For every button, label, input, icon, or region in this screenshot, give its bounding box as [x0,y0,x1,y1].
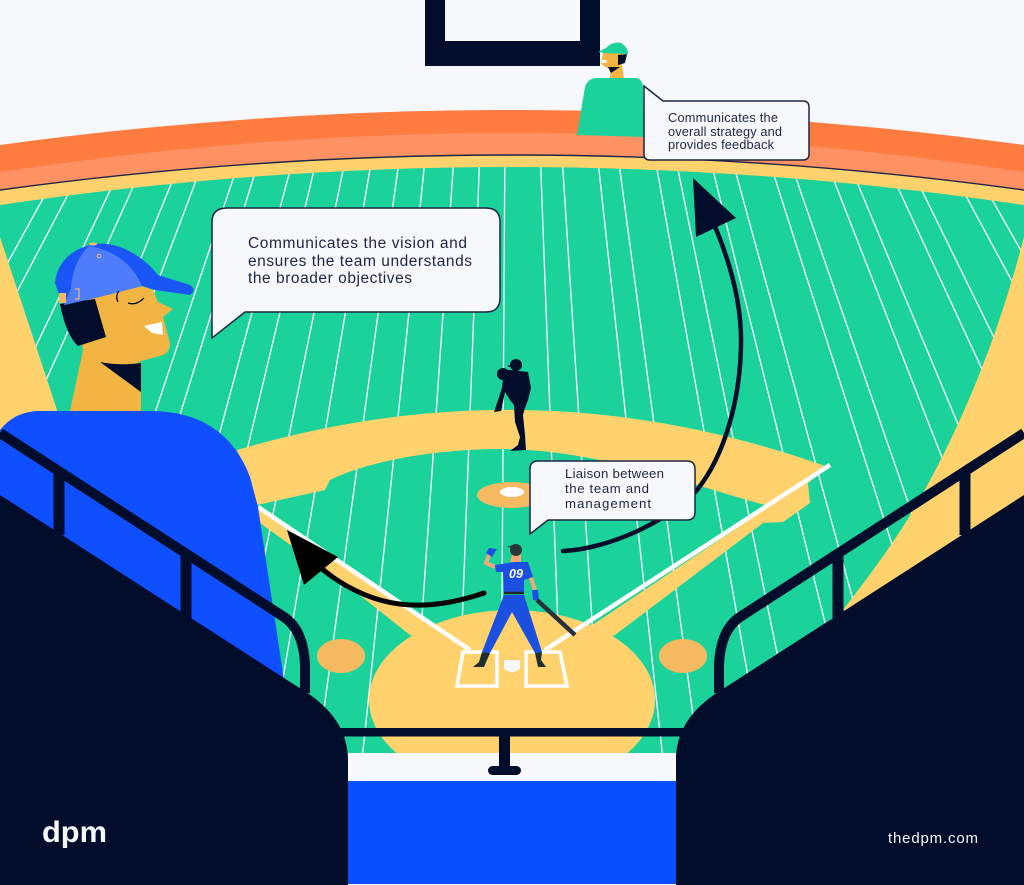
white ledge [348,753,676,781]
rail post and foot [488,735,521,775]
bubble: vision [212,208,500,338]
bubble: vision: Communicates the vision and [248,235,467,252]
neck [70,350,141,411]
small manager figure [577,43,644,137]
side walls [0,237,58,430]
cap [55,244,194,305]
bottom rail [340,728,685,736]
large figure: executive [55,242,194,411]
right stand [676,495,1024,885]
arrow: to executive [287,530,484,605]
batter boxes [457,652,567,686]
bubble: strategy: provides feedback [668,137,775,152]
bases [317,639,707,673]
bubble: liaison: the team and [565,481,649,496]
bubble: strategy: overall strategy and [668,124,782,139]
home plate [504,660,520,673]
arrow: up to strategy [563,178,741,551]
home plate dirt [369,610,655,753]
pitcher mound [477,482,530,508]
collar [100,362,141,392]
batter: 09 [509,567,523,581]
foul line dirt [592,476,817,636]
hair [60,299,106,346]
bubble: liaison: management [565,496,651,511]
bubble: vision: ensures the team understands [248,253,472,270]
pitcher silhouette [494,359,531,451]
face [75,286,173,365]
left railing [0,433,305,693]
batter [473,544,575,667]
playing field [0,167,1024,760]
blue wall [348,781,676,884]
bubble: liaison: Liaison between [565,466,664,481]
press box window [425,0,600,66]
logo: dpm [42,816,107,849]
bubble: strategy [644,86,809,160]
foul lines [258,465,830,650]
executive shirt [0,411,284,700]
site url: thedpm.com [888,830,978,847]
left stand [0,495,348,885]
stadium upper wall [0,110,1024,230]
infield dirt arc [237,410,828,505]
bubble: vision: the broader objectives [248,270,412,287]
right railing [719,433,1024,693]
bubble: liaison [530,461,695,534]
bubble: strategy: Communicates the [668,110,778,125]
outfield stripes [8,167,1021,753]
